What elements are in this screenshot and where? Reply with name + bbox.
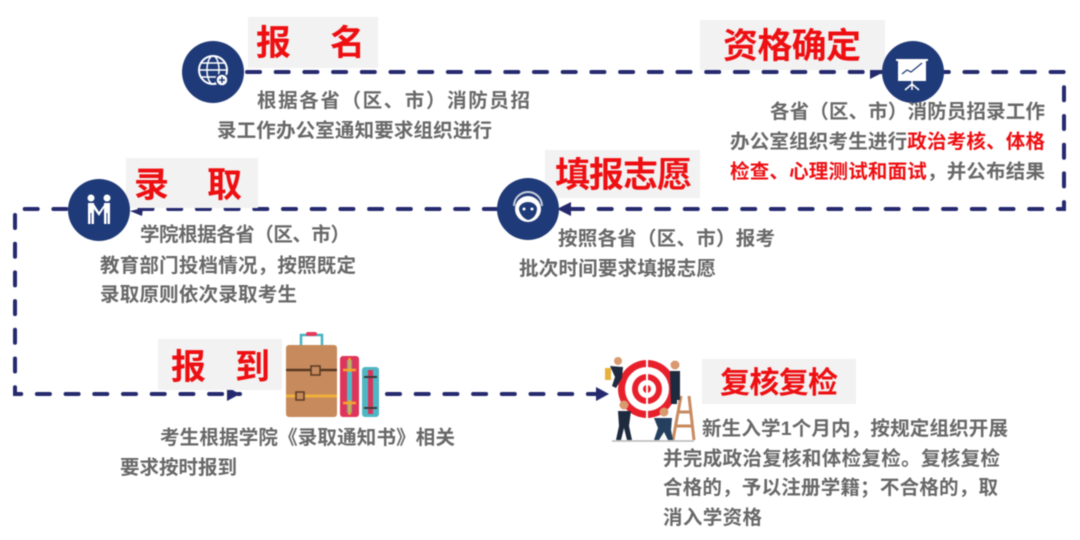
heading: check-in: 报 (171, 348, 206, 387)
step: application (497, 150, 775, 280)
text: recheck: 合格的，予以注册学籍；不合格的，取 (663, 476, 998, 499)
text: application: 批次时间要求填报志愿 (519, 258, 716, 280)
icon: globe (182, 41, 244, 103)
heading box: application (545, 150, 700, 198)
heading box: qualification (700, 20, 885, 70)
heading: application: 填报志愿 (555, 156, 692, 195)
heading: recheck: 复核复检 (720, 367, 838, 400)
arrow: to check-in (227, 387, 240, 401)
text: check-in: 要求按时报到 (120, 456, 237, 479)
heading: admission: 录 (134, 166, 169, 205)
text: qualification: 各省（区、市）消防员招录工作 (770, 100, 1045, 123)
text: recheck: 并完成政治复核和体检复检。复核复检 (663, 447, 1000, 470)
arrow: to application (557, 202, 571, 216)
heading: registration: 报 (256, 24, 291, 63)
text: admission: 学院根据各省（区、市） (140, 223, 350, 246)
step: registration (182, 17, 530, 142)
illustration: target and team (605, 357, 694, 441)
step: recheck (605, 357, 1008, 529)
heading: check-in: 到 (235, 348, 270, 387)
arrow: to admission (130, 208, 143, 216)
text: admission (100, 223, 356, 306)
arrow: to recheck (596, 387, 609, 401)
step: check-in (120, 332, 455, 479)
text: recheck: 消入学资格 (663, 506, 762, 529)
text: admission: 教育部门投档情况，按照既定 (100, 254, 356, 277)
text: qualification (730, 100, 1045, 183)
text: registration: 录工作办公室通知要求组织进行 (217, 119, 492, 142)
text: recheck (663, 417, 1008, 529)
text: admission: 录取原则依次录取考生 (100, 284, 297, 306)
icon: headset agent (497, 178, 559, 240)
step: qualification (700, 20, 1045, 183)
text: check-in: 考生根据学院《录取通知书》相关 (160, 426, 455, 449)
heading box: registration (248, 17, 378, 68)
icon: luggage (286, 332, 379, 417)
icon: handshake (68, 179, 130, 241)
text: application: 按照各省（区、市）报考 (558, 227, 775, 250)
heading: registration: 名 (330, 24, 365, 63)
text: qualification: 检查、心理测试和面试，并公布结果 (730, 160, 1045, 183)
text: registration: 根据各省（区、市）消防员招 (257, 89, 530, 112)
text: qualification: 办公室组织考生进行政治考核、体格 (730, 130, 1045, 153)
text: check-in (120, 426, 455, 479)
heading box: admission (126, 158, 258, 208)
text: application (519, 227, 775, 280)
heading: admission: 取 (207, 166, 242, 205)
heading: qualification: 资格确定 (723, 27, 861, 66)
text: recheck: 新生入学1个月内，按规定组织开展 (702, 417, 1008, 440)
flow path: dashed route (15, 72, 1064, 394)
heading box: check-in (158, 339, 282, 390)
icon: presentation board (882, 41, 944, 103)
arrow: to qualification (870, 65, 884, 79)
step: admission (68, 158, 356, 306)
heading box: recheck (702, 359, 856, 404)
text: registration (217, 89, 530, 142)
